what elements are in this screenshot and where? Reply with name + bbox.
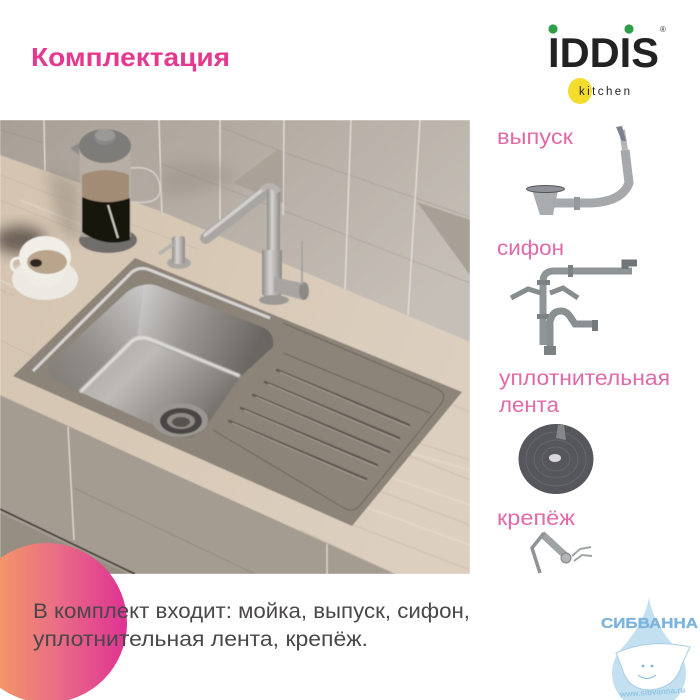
drainer ridges	[229, 370, 409, 479]
part: fasteners	[532, 533, 592, 573]
title: Комплектация	[31, 42, 230, 72]
summary text: В комплект входит: мойка, выпуск, сифон,	[33, 600, 470, 623]
wooden countertop	[0, 155, 470, 574]
logo wordmark: IDDIS	[548, 29, 659, 76]
soap dispenser	[160, 236, 191, 269]
label: сифон: сифон	[497, 237, 564, 260]
sink	[13, 258, 462, 526]
part: drain outlet	[526, 126, 629, 215]
watermark: Sibvanna logo	[601, 597, 699, 700]
label: выпуск: выпуск	[497, 126, 574, 149]
logo: IDDIS kitchen	[548, 24, 666, 104]
kitchen text: kitchen	[579, 86, 630, 98]
tiled wall	[0, 120, 470, 360]
bowl	[49, 284, 273, 438]
part: siphon	[511, 263, 637, 355]
label: уплотнительная лента: уплотнительная	[499, 367, 670, 390]
coffee press	[45, 129, 160, 253]
faucet	[205, 186, 309, 305]
sink deck	[13, 258, 462, 526]
label: уплотнительная лента: лента	[499, 394, 559, 417]
drain strainer	[152, 403, 208, 437]
drainer recess contour	[213, 323, 444, 510]
yellow blob	[568, 78, 592, 104]
coffee cup	[0, 226, 78, 300]
label: уплотнительная лента	[499, 367, 670, 417]
sink rim highlight	[33, 268, 270, 371]
bathtub	[616, 644, 690, 690]
gradient circle	[0, 543, 127, 700]
label: крепёж: крепёж	[497, 507, 575, 530]
kitchen photo panel	[0, 120, 470, 574]
summary text	[33, 600, 470, 651]
website: www.sibvanna.ru	[619, 685, 686, 699]
logo dots	[548, 24, 634, 34]
brand name: СИБВАННА	[601, 616, 699, 632]
water drop	[612, 597, 686, 700]
summary text: уплотнительная лента, крепёж.	[33, 628, 368, 651]
tub face	[638, 665, 656, 678]
part: sealing tape roll	[518, 424, 594, 494]
cabinet fronts	[0, 395, 395, 574]
registered mark: ®	[660, 25, 666, 34]
